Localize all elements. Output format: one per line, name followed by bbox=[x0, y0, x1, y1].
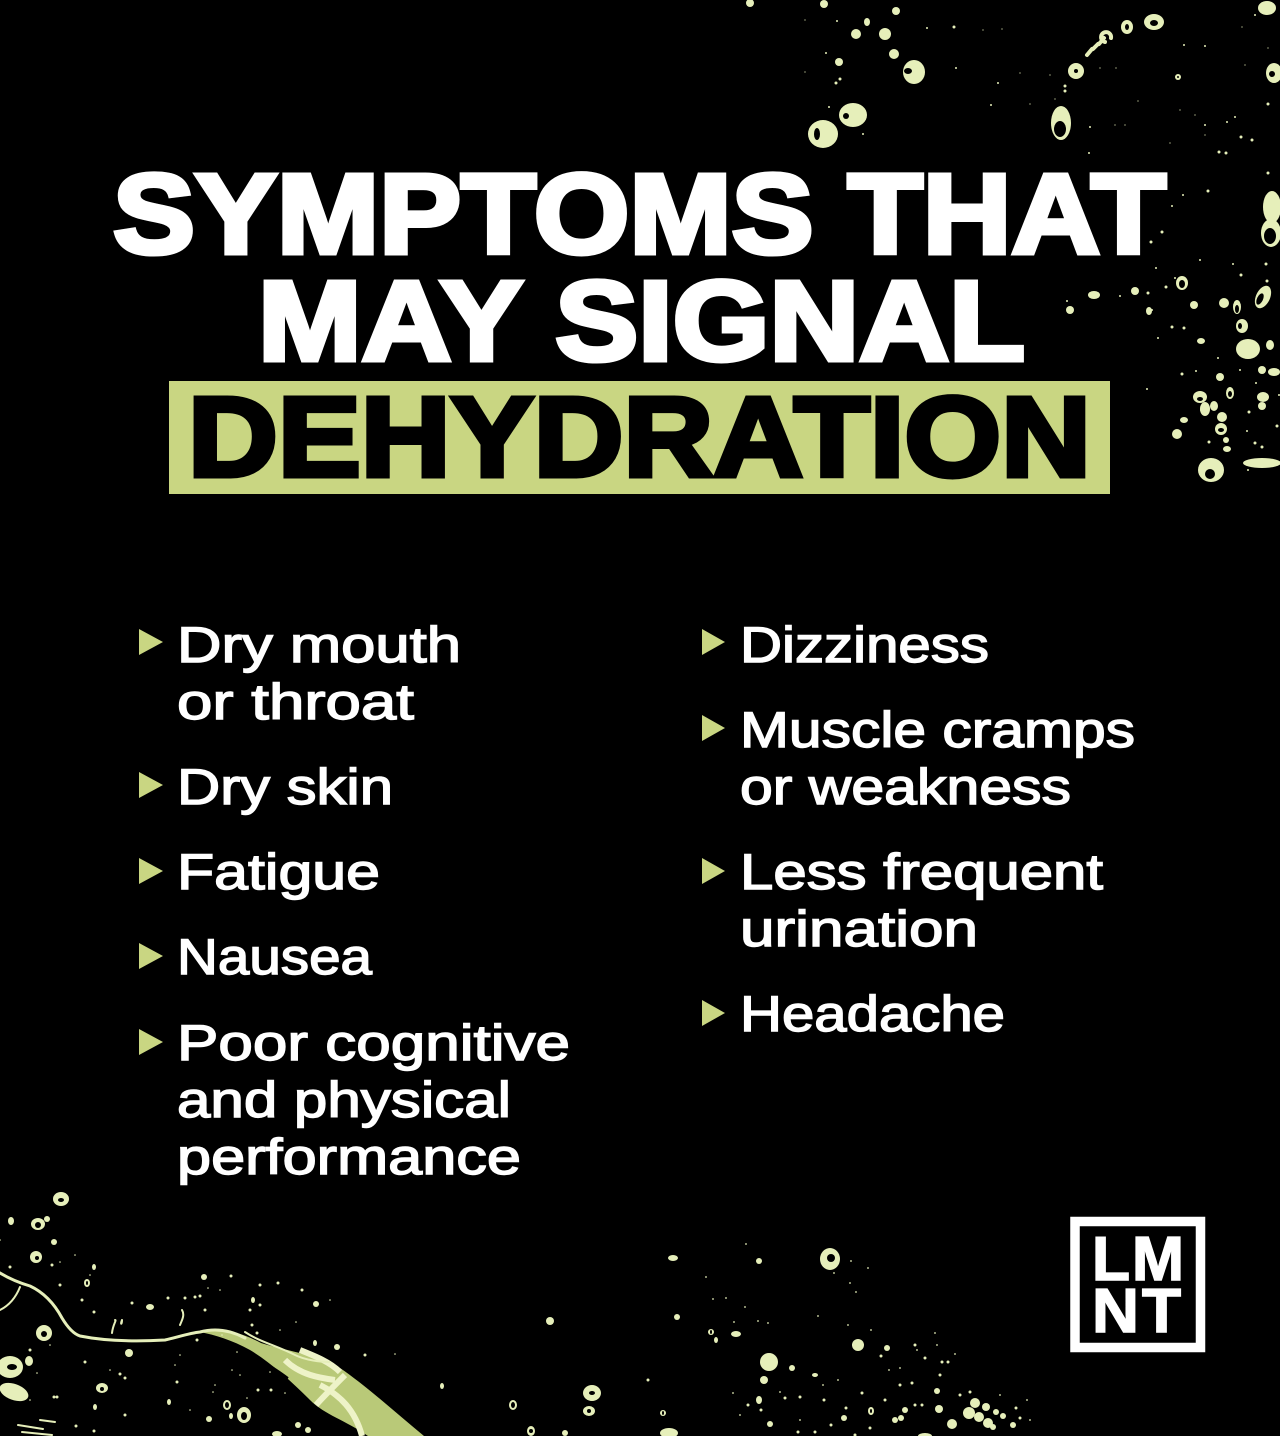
item: poor cognitive and physical performance bbox=[139, 1015, 570, 1185]
title bbox=[113, 151, 1166, 500]
water splash: bottom right bbox=[440, 1244, 1030, 1436]
item: dry mouth or throat: Dry mouth bbox=[177, 617, 461, 673]
logo: LMNT: M bbox=[1132, 1225, 1184, 1294]
item: poor cognitive and physical performance: performance bbox=[177, 1129, 521, 1185]
item: muscle cramps or weakness bbox=[702, 702, 1135, 815]
symptom list: right column bbox=[702, 617, 1135, 1042]
item: muscle cramps or weakness: Muscle cramps bbox=[740, 702, 1135, 758]
logo: LMNT: L bbox=[1092, 1225, 1130, 1294]
splash stream bbox=[200, 1330, 424, 1436]
item: less frequent urination bbox=[702, 844, 1103, 957]
item: dizziness: Dizziness bbox=[740, 617, 989, 673]
logo: LMNT: T bbox=[1142, 1277, 1181, 1346]
item: dry mouth or throat bbox=[139, 617, 461, 730]
item: poor cognitive and physical performance: Poor cognitive bbox=[177, 1015, 570, 1071]
item: less frequent urination: urination bbox=[740, 901, 978, 957]
item: fatigue bbox=[139, 844, 380, 900]
item: nausea: Nausea bbox=[177, 929, 372, 985]
symptom list: left column bbox=[139, 617, 570, 1185]
item: less frequent urination: Less frequent bbox=[740, 844, 1103, 900]
water splash: top right bbox=[746, 0, 1280, 482]
item: muscle cramps or weakness: or weakness bbox=[740, 759, 1071, 815]
water splash: bottom left bbox=[0, 1192, 424, 1436]
item: fatigue: Fatigue bbox=[177, 844, 380, 900]
logo: LMNT: N bbox=[1092, 1277, 1139, 1346]
title line: may signal: MAY SIGNAL bbox=[258, 258, 1025, 384]
item: dry mouth or throat: or throat bbox=[177, 674, 414, 730]
logo: LMNT bbox=[1075, 1222, 1200, 1348]
title line: symptoms that: SYMPTOMS THAT bbox=[113, 151, 1166, 277]
item: poor cognitive and physical performance: and physical bbox=[177, 1072, 511, 1128]
highlighted heading: dehydration: DEHYDRATION bbox=[188, 374, 1091, 500]
item: dry skin: Dry skin bbox=[177, 759, 393, 815]
item: headache: Headache bbox=[740, 986, 1005, 1042]
